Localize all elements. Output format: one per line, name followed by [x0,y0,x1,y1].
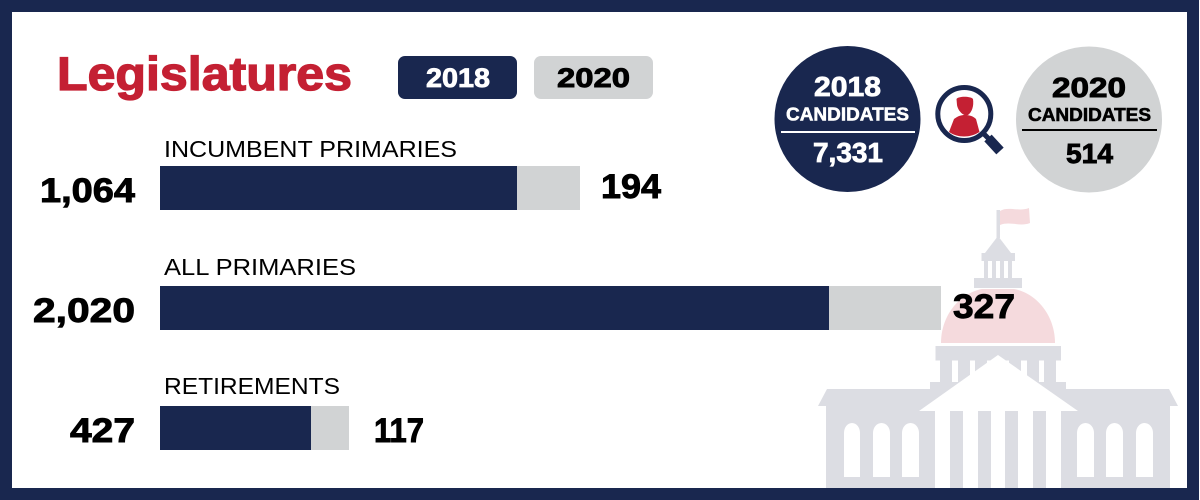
row: all primaries [33,254,1015,330]
central portico [919,355,1078,488]
right wing [1061,389,1178,488]
row: all primaries: 2,020 [33,292,135,330]
stat: 2020 candidates [1016,46,1162,192]
stat: 2018 candidates: 7,331 [813,137,883,168]
arched windows [844,423,1153,477]
legend: 2020: 2020 [557,63,630,93]
row: incumbent primaries [40,136,661,210]
row: all primaries: ALL PRIMARIES [164,254,356,280]
row: incumbent primaries: 194 [601,168,661,206]
row: incumbent primaries: INCUMBENT PRIMARIES [164,136,457,162]
title: Legislatures [57,47,352,100]
stat: 2020 candidates: CANDIDATES [1028,105,1151,125]
row: retirements [70,373,424,450]
dome [941,289,1055,343]
row: retirements: 117 [374,412,424,450]
stat: 2020 candidates: 514 [1066,138,1113,169]
stat: 2020 candidates: 2020 [1052,72,1126,103]
left wing [818,389,935,488]
stat: 2018 candidates: 2018 [814,71,881,102]
legend: 2018 [398,56,517,99]
icon: magnifying glass with person [938,88,1000,151]
stat: 2018 candidates: CANDIDATES [786,104,909,124]
row: incumbent primaries: 1,064 [40,172,135,210]
icon: capitol building [818,208,1178,488]
legend: 2020 [534,56,653,99]
stat: 2018 candidates [774,46,920,192]
row: all primaries: 327 [953,288,1015,326]
flag [1000,208,1030,225]
legend: 2018: 2018 [426,63,490,93]
row: retirements: RETIREMENTS [164,373,340,399]
row: retirements: 427 [70,412,135,450]
